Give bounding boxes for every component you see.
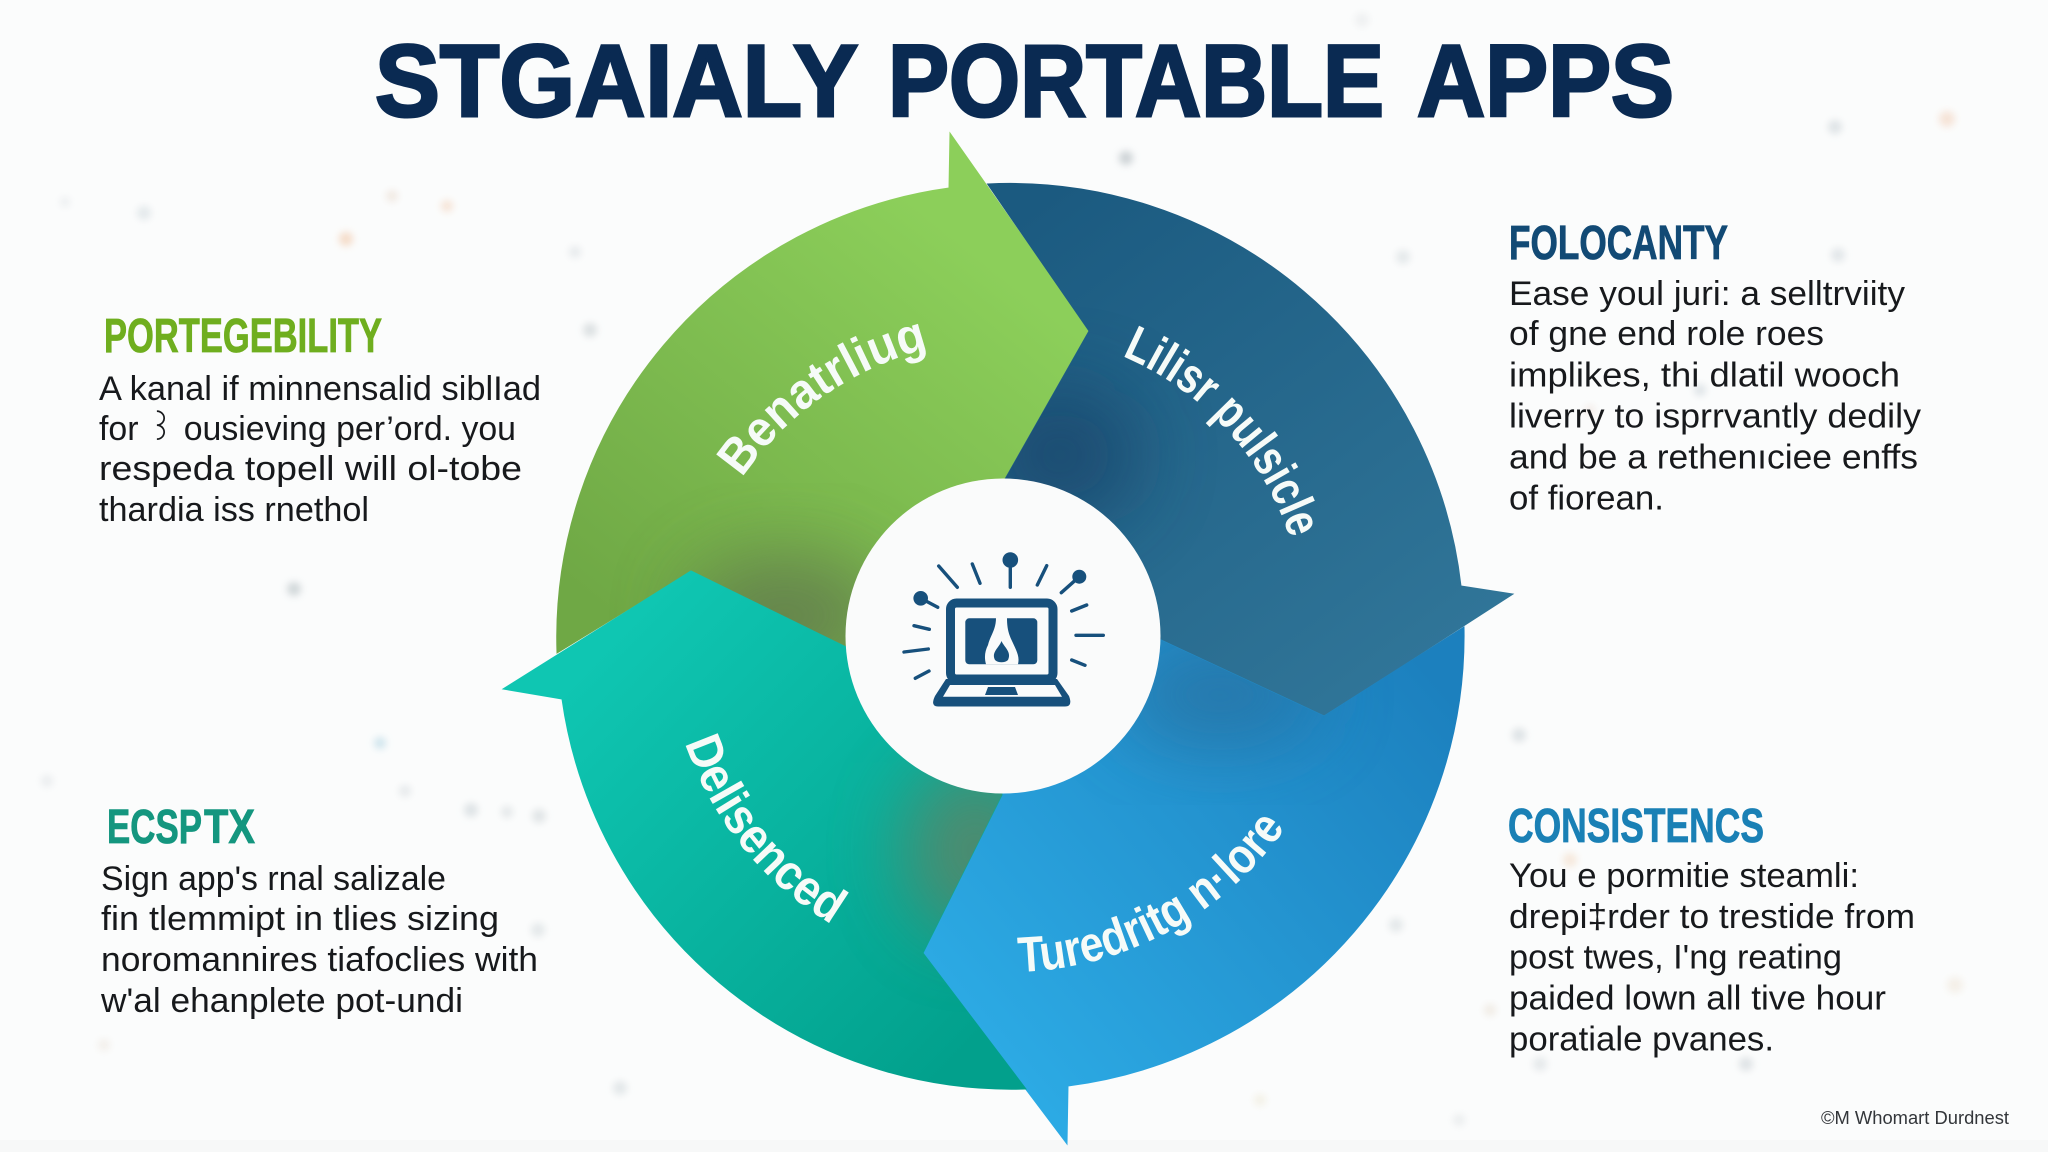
title: STGAIALY <box>375 24 858 138</box>
label: dark segment: Lilisr pulsicle <box>1124 326 1315 535</box>
title: PORTABLE <box>888 24 1384 138</box>
heading: ECSP <box>107 801 202 854</box>
body text <box>100 860 538 1020</box>
heading: PORTEGEBILITY <box>104 310 382 363</box>
segment: blue arrow <box>923 627 1464 1144</box>
icon: laptop with flame and rays <box>904 552 1103 706</box>
panel: folocanty <box>1509 217 1921 518</box>
heading: TX <box>204 801 255 854</box>
footer credit: ©M Whomart Durdnest <box>1821 1107 2009 1128</box>
body text: poratiale pvanes. <box>1509 1020 1774 1058</box>
heading: CONSISTENCS <box>1508 800 1764 853</box>
panel: consistencs <box>1508 800 1915 1058</box>
title: APPS <box>1417 24 1674 138</box>
title <box>375 24 1674 138</box>
panel: ecsp <box>100 801 538 1020</box>
body text: post twes, I'ng reating <box>1509 938 1842 976</box>
body text: drepi‡rder to trestide from <box>1509 898 1915 936</box>
body text: respeda topell will ol-tobe <box>99 450 522 488</box>
body text: A kanal if minnensalid siblIad <box>99 370 541 408</box>
body text: implikes, thi dlatil wooch <box>1509 356 1900 394</box>
center circle <box>846 478 1160 794</box>
body text: of fiorean. <box>1509 480 1664 518</box>
label: blue segment: Turedritg n·lore <box>1017 817 1282 972</box>
body text: Ease youl juri: a selltrviity <box>1509 275 1905 313</box>
body text: of gne end role roes <box>1509 315 1824 353</box>
heading: FOLOCANTY <box>1509 217 1728 270</box>
label: green segment: Benatrliug <box>716 324 926 476</box>
body text: w'al ehanplete pot-undi <box>100 982 463 1020</box>
segment: teal arrow <box>503 571 1045 1089</box>
body text: Sign app's rnal salizale <box>101 860 446 898</box>
body text <box>1509 275 1921 518</box>
body text: fin tlemmipt in tlies sizing <box>101 900 499 938</box>
body text: You e pormitie steamli: <box>1509 857 1859 895</box>
body text: for ꒱ ousieving per’ord. you <box>99 410 516 448</box>
body text: liverry to isprrvantly dedily <box>1509 398 1921 436</box>
cycle diagram <box>502 132 1514 1146</box>
segment: dark blue arrow <box>980 183 1513 716</box>
body text: and be a rethenıciee enffs <box>1509 438 1918 476</box>
body text: noromannires tiafoclies with <box>101 941 538 979</box>
body text: thardia iss rnethol <box>99 491 369 529</box>
segment: green arrow <box>557 133 1089 675</box>
panel: portegebility <box>99 310 541 529</box>
body text <box>1509 857 1915 1058</box>
body text <box>99 370 541 529</box>
body text: paided lown all tive hour <box>1509 980 1886 1018</box>
label: teal segment: Delisenced <box>686 733 849 923</box>
